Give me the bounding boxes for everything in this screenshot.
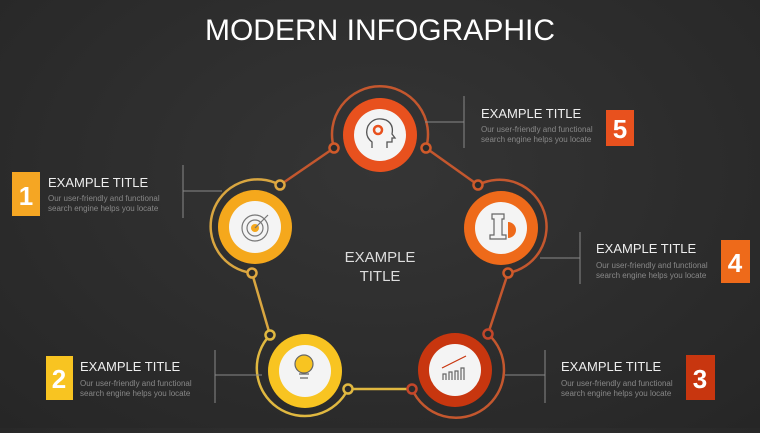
item 3: 3 <box>693 364 707 394</box>
connector ring <box>211 86 547 418</box>
item 3: Our user-friendly and functional <box>561 379 673 388</box>
item 4: EXAMPLE TITLE <box>596 241 697 256</box>
item 1 <box>12 172 160 216</box>
item 1: search engine helps you locate <box>48 204 159 213</box>
item 1: 1 <box>19 181 33 211</box>
item 5 <box>481 106 634 146</box>
center text: EXAMPLE <box>345 249 415 266</box>
node 3 <box>418 333 492 407</box>
item 4: 4 <box>728 248 743 278</box>
item 1: Our user-friendly and functional <box>48 194 160 203</box>
icon: chess rook <box>490 214 516 239</box>
item 1: EXAMPLE TITLE <box>48 175 149 190</box>
item 2 <box>46 356 192 400</box>
icon: bar chart <box>442 356 466 380</box>
center text: TITLE <box>360 268 400 285</box>
item 3 <box>561 355 715 400</box>
item 5: search engine helps you locate <box>481 135 592 144</box>
node 5 <box>343 98 417 172</box>
item 4: Our user-friendly and functional <box>596 261 708 270</box>
item 2: 2 <box>52 364 66 394</box>
node 4 <box>464 191 538 265</box>
item 4 <box>596 240 750 283</box>
item 5: Our user-friendly and functional <box>481 125 593 134</box>
node 1 <box>218 190 292 264</box>
item 5: 5 <box>613 114 627 144</box>
item 5: EXAMPLE TITLE <box>481 106 582 121</box>
item 2: Our user-friendly and functional <box>80 379 192 388</box>
item 3: EXAMPLE TITLE <box>561 359 662 374</box>
icon: target <box>242 215 268 241</box>
item 2: search engine helps you locate <box>80 389 191 398</box>
item 3: search engine helps you locate <box>561 389 672 398</box>
title: MODERN INFOGRAPHIC <box>205 14 555 47</box>
node 2 <box>268 334 342 408</box>
item 4: search engine helps you locate <box>596 271 707 280</box>
icon: bulb <box>295 355 313 378</box>
item 2: EXAMPLE TITLE <box>80 359 181 374</box>
icon: head gear <box>367 119 395 148</box>
callout lines <box>183 96 580 403</box>
